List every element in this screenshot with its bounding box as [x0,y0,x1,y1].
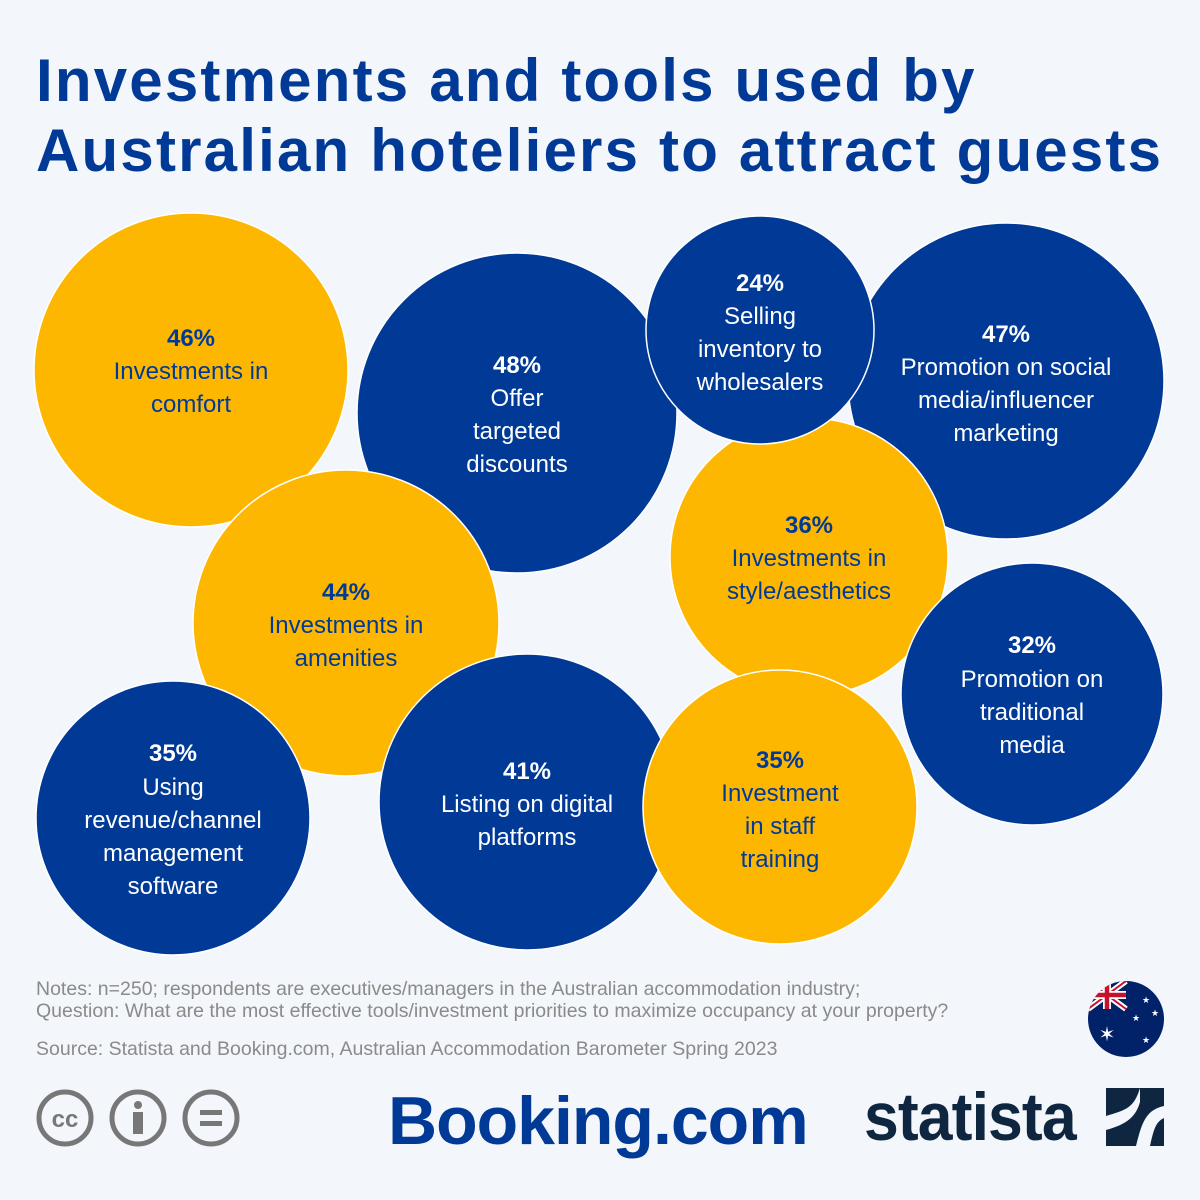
bubble: 41% digital [379,654,675,950]
bubble: 35% software: revenue/channel [84,807,262,834]
bubble: 24% wholesalers: wholesalers [696,369,823,396]
icon: australian flag: ★ [1142,995,1150,1005]
bubble: 35% staff: in staff [745,813,815,840]
bubble: 41% digital: 41% [503,758,551,785]
bubble: 48% discounts: Offer [491,385,543,412]
source: Source: Statista and Booking.com, Australian Accommodation Barometer Spring 2023 [36,1038,777,1060]
bubble: 44% amenities: amenities [295,645,397,672]
bubble: 46% comfort: comfort [151,391,231,418]
bubble: 47% social media: 47% [982,321,1030,348]
bubble: 32% traditional: traditional [980,699,1084,726]
title [36,47,1163,184]
bubble: 46% comfort [34,213,348,527]
bubble: 24% wholesalers: inventory to [698,336,822,363]
notes [36,978,948,1022]
icon: australian flag [1088,981,1164,1057]
bubble: 36% style: style/aesthetics [727,578,891,605]
logo: booking.com: Booking.com [388,1083,808,1159]
bubble: 35% software: management [103,840,243,867]
icon: australian flag: ★ [1142,1035,1150,1045]
icon: australian flag: ★ [1132,1013,1140,1023]
bubble: 47% social media: media/influencer [918,387,1094,414]
icon: australian flag: ★ [1151,1008,1159,1018]
bubble: 35% software: software [128,873,218,900]
bubble: 44% amenities [193,470,499,776]
bubble: 41% digital: platforms [478,824,576,851]
bubble: 48% discounts: discounts [466,451,568,478]
bubble: 32% traditional [901,563,1163,825]
title: Investments and tools used by [36,47,977,114]
bubble: 35% staff [643,670,917,944]
bubble: 48% discounts: 48% [493,352,541,379]
bubble: 35% staff: 35% [756,747,804,774]
bubble: 24% wholesalers: 24% [736,270,784,297]
bubble: 35% software: 35% [149,740,197,767]
bubble: 44% amenities: Investments in [269,612,423,639]
bubble: 41% digital: Listing on digital [441,791,613,818]
bubble: 36% style [670,418,948,696]
title: Australian hoteliers to attract guests [36,117,1163,184]
bubble: 35% software [36,681,310,955]
bubble: 46% comfort: 46% [167,325,215,352]
logo: statista: statista [864,1079,1076,1155]
bubble: 32% traditional: Promotion on [961,666,1103,693]
bubble: 36% style: Investments in [732,545,886,572]
bubble: 35% staff: Investment [721,780,839,807]
bubble chart [34,212,1164,956]
icon: creative commons [36,1090,240,1146]
bubble: 24% wholesalers [646,216,874,444]
bubble: 46% comfort: Investments in [114,358,268,385]
bubble: 36% style: 36% [785,512,833,539]
icon: australian flag: ✶ [1099,1024,1115,1046]
bubble: 35% software: Using [142,774,204,801]
icon: creative commons: cc [52,1106,78,1133]
bubble: 48% discounts [357,253,677,573]
bubble: 47% social media [848,223,1164,539]
bubble: 32% traditional: 32% [1008,632,1056,659]
bubble: 48% discounts: targeted [473,418,561,445]
notes: Question: What are the most effective tools/investment priorities to maximize occupancy at your property? [36,1000,948,1022]
bubble: 47% social media: marketing [953,420,1059,447]
bubble: 47% social media: Promotion on social [901,354,1111,381]
notes: Notes: n=250; respondents are executives/managers in the Australian accommodation industry; [36,978,860,1000]
bubble: 24% wholesalers: Selling [724,303,796,330]
bubble: 35% staff: training [741,846,819,873]
bubble: 44% amenities: 44% [322,579,370,606]
bubble: 32% traditional: media [999,732,1065,759]
